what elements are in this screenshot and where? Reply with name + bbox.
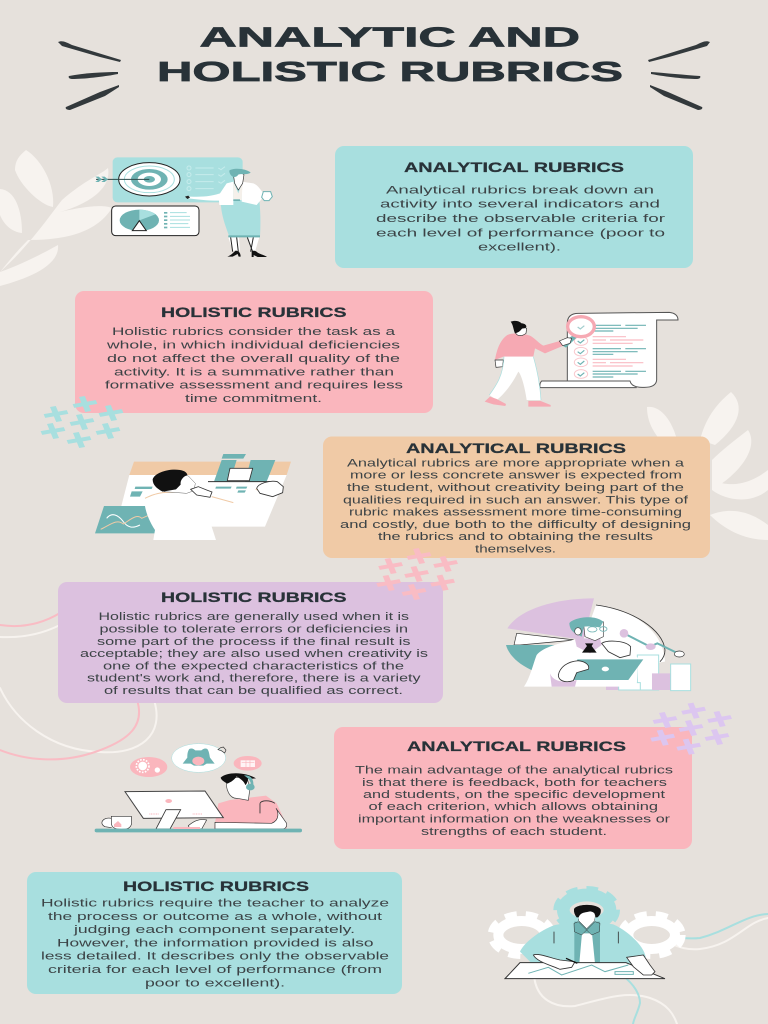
illustration: man studying bar chart board xyxy=(95,454,291,540)
body text: However, the information provided is also xyxy=(57,938,374,950)
decorative leaves: right xyxy=(647,392,768,540)
body text: of results that can be qualified as correct. xyxy=(104,685,403,697)
body text: acceptable; they are also used when creativity is xyxy=(80,648,429,660)
body text: strengths of each student. xyxy=(421,826,607,838)
heading: HOLISTIC RUBRICS xyxy=(161,589,346,605)
body text: qualities required in such an answer. This type of xyxy=(343,494,689,506)
decoration: teal cross cluster xyxy=(38,394,126,450)
body text xyxy=(80,611,429,697)
body text xyxy=(376,184,665,254)
icon: left brush rays xyxy=(58,41,121,110)
body text: activity into several indicators and xyxy=(380,198,660,210)
body text: Analytical rubrics break down an xyxy=(386,184,654,196)
body text: rubric makes assessment more time-consuming xyxy=(349,507,682,519)
body text: The main advantage of the analytical rubrics xyxy=(355,764,674,776)
panel: holistic rubrics 1 xyxy=(75,291,433,413)
body text: activity. It is a summative rather than xyxy=(114,366,394,378)
body text: Analytical rubrics are more appropriate when a xyxy=(347,457,684,469)
body text: Holistic rubrics require the teacher to analyze xyxy=(41,898,389,910)
body text: of each criterion, which allows obtaining xyxy=(368,801,658,813)
decoration: pink cross cluster xyxy=(374,546,460,602)
body text xyxy=(41,898,389,989)
body text: possible to tolerate errors or deficiencies in xyxy=(100,624,408,636)
body text: each level of performance (poor to xyxy=(376,228,665,240)
illustration: person at computer with thought bubbles xyxy=(95,744,302,832)
body text: more or less concrete answer is expected from xyxy=(350,470,682,482)
heading: HOLISTIC RUBRICS xyxy=(123,878,309,894)
body text: Holistic rubrics are generally used when it is xyxy=(98,611,410,623)
illustration: woman presenting target and pie chart xyxy=(95,157,272,257)
body text: important information on the weaknesses or xyxy=(358,814,671,826)
heading: ANALYTICAL RUBRICS xyxy=(406,440,626,456)
decoration: purple cross cluster xyxy=(648,701,734,756)
body text: some part of the process if the final result is xyxy=(97,636,411,648)
heading: HOLISTIC RUBRICS xyxy=(161,304,346,320)
body text xyxy=(340,457,691,555)
panel: holistic rubrics 2 xyxy=(58,582,443,703)
illustration: man with laptop and charts xyxy=(506,598,691,691)
panel: analytical rubrics 3 xyxy=(334,727,692,849)
body text: do not affect the overall quality of the xyxy=(107,353,400,365)
body text: less detailed. It describes only the observable xyxy=(41,951,389,963)
body text: the student, without creativity being part of the xyxy=(347,482,684,494)
body text: and costly, due both to the difficulty of designing xyxy=(340,519,691,531)
heading: ANALYTICAL RUBRICS xyxy=(407,738,626,754)
panel: analytical rubrics 1 xyxy=(335,146,693,268)
body text: formative assessment and requires less xyxy=(105,380,404,392)
body text: criteria for each level of performance (from xyxy=(48,964,382,976)
body text: and students, on the specific development xyxy=(363,789,665,801)
body text: excellent). xyxy=(478,242,561,254)
decorative leaves: top left xyxy=(0,150,112,286)
body text: time commitment. xyxy=(185,393,322,405)
heading: ANALYTICAL RUBRICS xyxy=(404,159,624,175)
decorative curves: bottom right xyxy=(534,914,768,1024)
body text: poor to excellent). xyxy=(145,977,285,989)
body text: themselves. xyxy=(475,543,556,555)
title: ANALYTIC AND xyxy=(200,22,580,52)
body text xyxy=(105,326,404,405)
title xyxy=(157,22,623,87)
body text: Holistic rubrics consider the task as a xyxy=(112,326,396,338)
illustration: woman checking list with magnifier xyxy=(485,312,678,407)
decorative curves: left xyxy=(0,613,157,759)
body text: is that there is feedback, both for teachers xyxy=(362,777,668,789)
body text: judging each component separately. xyxy=(72,924,355,936)
body text: the rubrics and to obtaining the results xyxy=(378,531,654,543)
body text: describe the observable criteria for xyxy=(376,213,665,225)
icon: right brush rays xyxy=(648,41,710,110)
body text: student's work and, therefore, there is a variety xyxy=(87,673,421,685)
body text xyxy=(355,764,674,838)
panel: holistic rubrics 3 xyxy=(27,872,402,994)
body text: one of the expected characteristics of the xyxy=(103,660,404,672)
panel: analytical rubrics 2 xyxy=(323,436,710,558)
illustration: man at desk with gears xyxy=(491,889,682,979)
body text: whole, in which individual deficiencies xyxy=(105,340,401,352)
title: HOLISTIC RUBRICS xyxy=(157,56,623,87)
body text: the process or outcome as a whole, without xyxy=(48,911,383,923)
